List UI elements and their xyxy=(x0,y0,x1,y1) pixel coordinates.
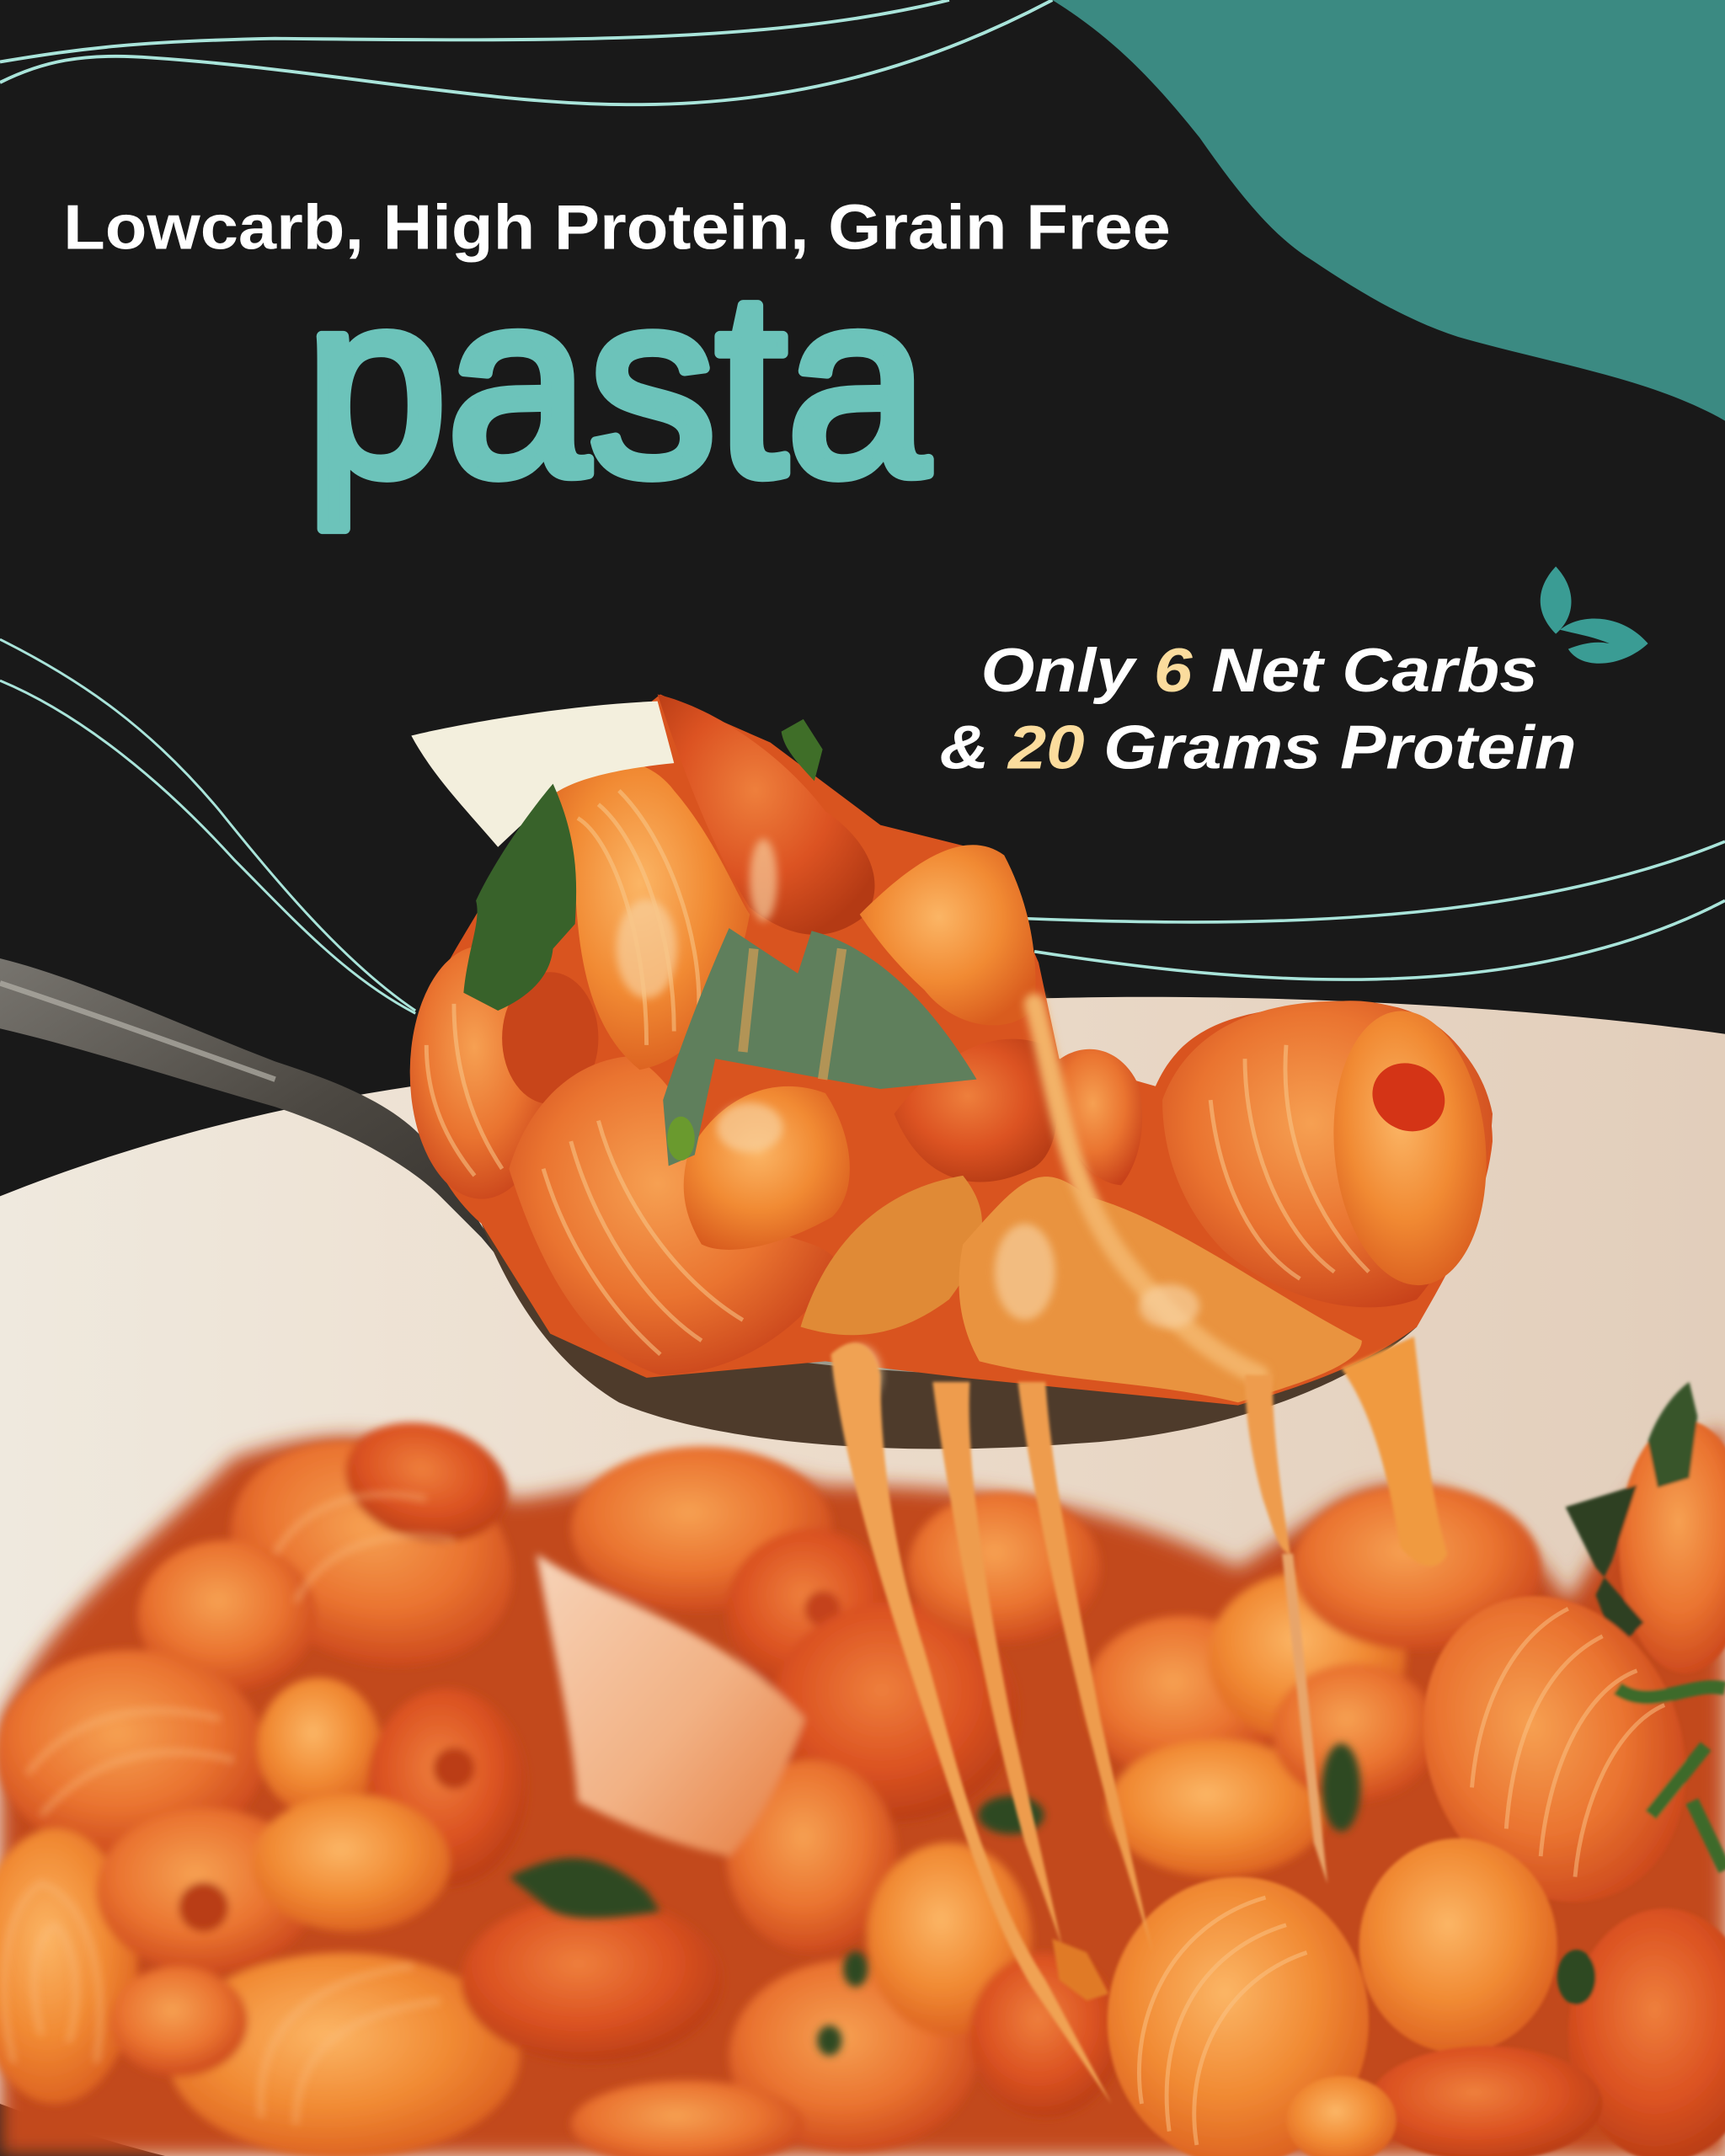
spoon handle xyxy=(0,958,539,1306)
nutrition callout: Only 6 Net Carbs xyxy=(980,635,1538,705)
basil: centre xyxy=(663,928,977,1166)
basil: left xyxy=(463,784,576,1011)
piece: lower left shell xyxy=(509,1056,839,1375)
nutrition callout: & 20 Grams Protein xyxy=(939,712,1577,782)
pasta ridges, foreground xyxy=(1139,1609,1664,2145)
pasta in bowl, out of focus xyxy=(0,1404,1725,2156)
right flowing lines xyxy=(1025,841,1725,979)
spoonful of pasta xyxy=(410,694,1498,1406)
piece: sauce middle xyxy=(895,1039,1057,1182)
teal corner blob xyxy=(1052,0,1725,421)
cheese strands xyxy=(830,1337,1447,2104)
piece: big right shell xyxy=(1162,1001,1493,1307)
piece: left shell xyxy=(410,946,553,1199)
spoon bowl xyxy=(482,1224,1417,1449)
pasta in bowl, foreground xyxy=(1108,1382,1725,2156)
piece: yellow chunk xyxy=(684,1086,850,1250)
cheese highlights xyxy=(617,839,1199,1406)
pasta title: pasta xyxy=(306,237,930,531)
piece: upper shell xyxy=(550,759,750,1070)
piece: small centre shell xyxy=(1052,1049,1142,1185)
piece: shell hole xyxy=(1360,1050,1457,1145)
shell ridges xyxy=(426,791,1369,1354)
parmesan shard xyxy=(411,702,674,847)
bowl xyxy=(0,997,1725,2156)
headline tagline: Lowcarb, High Protein, Grain Free xyxy=(63,192,1171,263)
left flowing lines xyxy=(0,639,415,1013)
icon: leaves xyxy=(1541,567,1648,664)
piece: right top xyxy=(860,845,1035,1025)
piece: shadowed shell xyxy=(502,972,598,1104)
piece: shell lobe xyxy=(1322,1005,1498,1292)
piece: red top xyxy=(658,694,875,935)
spoon rim highlight xyxy=(771,1327,1390,1371)
cheese stream xyxy=(1034,1004,1258,1375)
piece: melted cheese xyxy=(959,1177,1362,1402)
basil: small top xyxy=(782,719,823,781)
nutrition callout xyxy=(939,635,1577,782)
piece: tan shell xyxy=(801,1176,982,1335)
top flowing lines xyxy=(0,0,1052,104)
